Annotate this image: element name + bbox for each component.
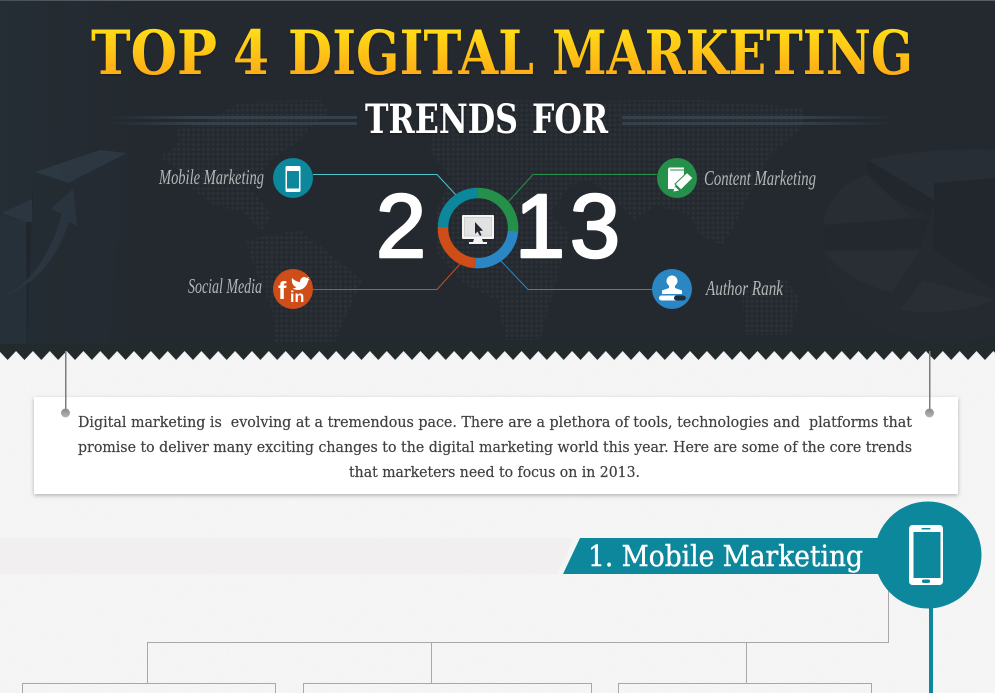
- year: 2013: [376, 177, 620, 277]
- zigzag header edge: [0, 344, 995, 351]
- icon: book and pencil: [657, 158, 697, 198]
- subtitle: TRENDS: [365, 96, 518, 143]
- subtitle: FOR: [532, 96, 609, 143]
- callout: social media: [188, 269, 313, 309]
- title: 4: [233, 18, 269, 89]
- background graphic: pie chart: [823, 149, 995, 343]
- background graphic: rising bar chart: [0, 150, 127, 351]
- icon: monitor with cursor: [462, 215, 494, 244]
- callout: mobile marketing: Mobile Marketing: [158, 165, 264, 189]
- flow lines: [148, 590, 888, 683]
- world map dots: [160, 100, 805, 342]
- icon: smartphone: [909, 525, 943, 585]
- icon: social logos: in: [290, 289, 304, 306]
- callout: social media: Social Media: [188, 274, 262, 298]
- intro text: that marketers need to focus on in 2013.: [349, 465, 640, 481]
- year: 2013: 2: [376, 177, 426, 277]
- intro text: promise to deliver many exciting changes to the digital marketing world this year. Here are some of the core trends: [78, 440, 912, 456]
- icon: tablet: [273, 158, 313, 198]
- pin: right: [925, 351, 934, 418]
- panel: card 1 top: [22, 684, 276, 693]
- callout: content marketing: Content Marketing: [704, 166, 816, 190]
- callout: content marketing: [657, 158, 816, 198]
- panel: card 3 top: [618, 684, 872, 693]
- intro text: [78, 415, 912, 481]
- title: TOP: [91, 18, 217, 89]
- callout: author rank: [652, 269, 783, 309]
- callout: author rank: Author Rank: [705, 276, 783, 300]
- intro text: Digital marketing is evolving at a tremendous pace. There are a plethora of tools, technologies and platforms that: [78, 415, 912, 431]
- timeline stem: [929, 605, 933, 693]
- title: MARKETING: [552, 18, 913, 89]
- panel: card 2 top: [304, 684, 592, 693]
- year: 2013: 1: [515, 177, 565, 277]
- center ring: [443, 193, 513, 263]
- section heading: mobile marketing: [563, 502, 982, 608]
- section band: [0, 538, 574, 574]
- subtitle rules: [105, 116, 896, 125]
- title: DIGITAL: [288, 18, 534, 89]
- connector lines: [313, 174, 657, 290]
- callout: mobile marketing: [158, 158, 313, 198]
- year: 2013: 3: [570, 177, 620, 277]
- panel: intro card: [34, 397, 958, 494]
- pin: left: [61, 351, 70, 418]
- section heading: mobile marketing: 1. Mobile Marketing: [588, 540, 863, 573]
- panel: dark header: [0, 0, 995, 351]
- icon: social logos: [273, 269, 313, 309]
- title: [91, 18, 913, 89]
- icon: social logos: f: [278, 277, 287, 305]
- icon: author: [652, 269, 692, 309]
